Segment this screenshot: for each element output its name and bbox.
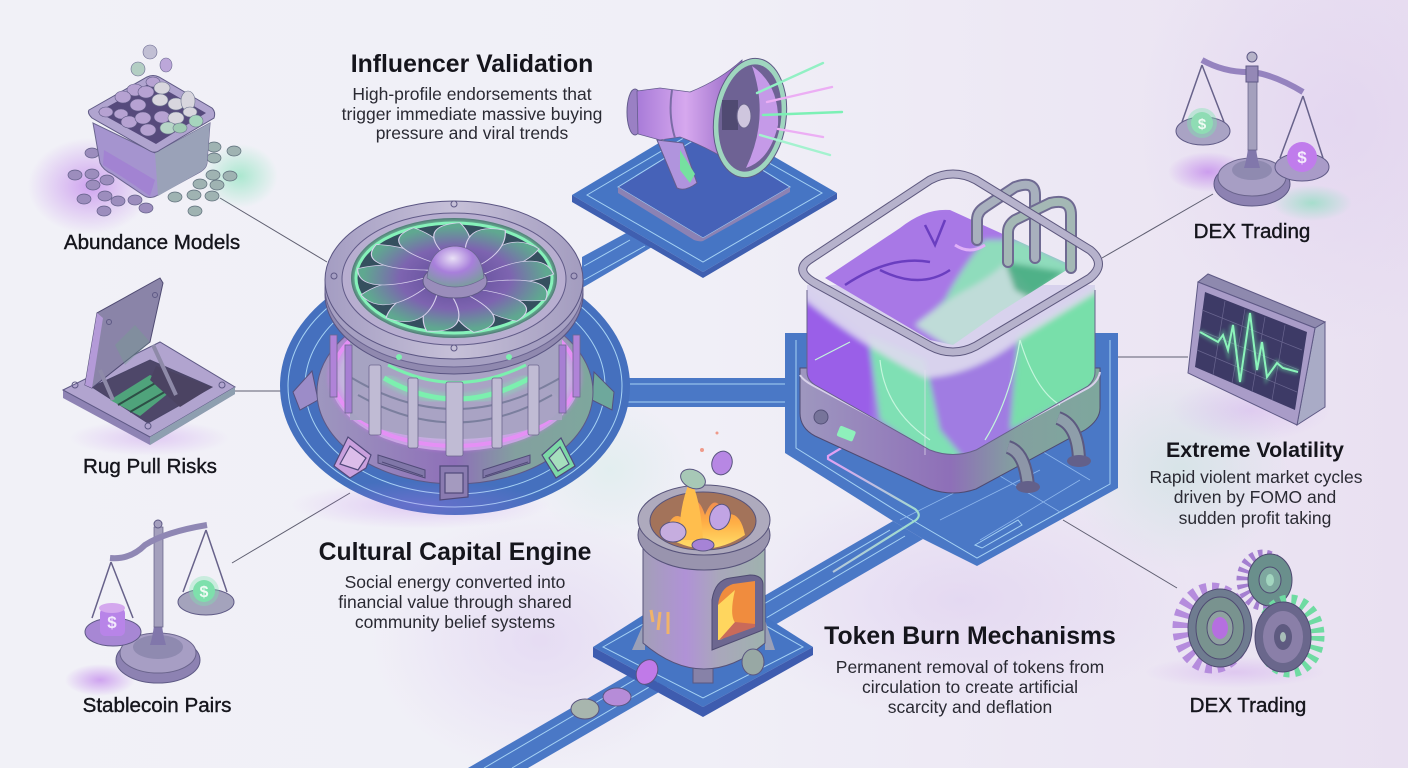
- heading: token burn mechanisms: scarcity and deflation: [888, 697, 1052, 717]
- heading: token burn mechanisms: [824, 623, 1116, 717]
- heading: cultural capital engine: financial value through shared: [338, 592, 572, 612]
- icon: balance scale (dex trading): $: [1297, 148, 1307, 167]
- heading: influencer validation: pressure and viral trends: [376, 123, 569, 143]
- heading: influencer validation: Influencer Validation: [351, 51, 593, 78]
- heading: influencer validation: trigger immediate massive buying: [342, 104, 602, 124]
- icon: balance scale (dex trading): [1168, 52, 1352, 221]
- heading: extreme volatility: sudden profit taking: [1179, 508, 1331, 528]
- panel: megaphone platform: [572, 116, 837, 278]
- label: abundance models: Abundance Models: [64, 231, 240, 254]
- icon: balance scale (stablecoin pairs): [65, 520, 234, 696]
- heading: influencer validation: [342, 51, 602, 143]
- heading: cultural capital engine: Social energy converted into: [345, 572, 565, 592]
- panel: furnace platform: [593, 577, 813, 717]
- heading: cultural capital engine: Cultural Capital Engine: [319, 539, 591, 566]
- panel: tank platform: [785, 333, 1118, 566]
- icon: balance scale (stablecoin pairs): $: [107, 613, 117, 632]
- illustration: cultural capital engine: [293, 201, 614, 500]
- blue paths between platforms: [468, 232, 923, 768]
- tank rim: [803, 174, 1098, 352]
- icon: volatility monitor: [1170, 274, 1330, 442]
- big gear: [1180, 589, 1252, 667]
- heading: influencer validation: High-profile endorsements that: [352, 84, 592, 104]
- label: dex trading bottom: DEX Trading: [1190, 694, 1306, 717]
- engine columns: [330, 335, 580, 456]
- tank pipes: [1008, 418, 1091, 493]
- label: dex trading top: DEX Trading: [1194, 220, 1310, 243]
- engine pedestals back: [293, 371, 614, 410]
- connector lines: [220, 194, 1213, 588]
- icon: balance scale (dex trading): $: [1198, 116, 1207, 133]
- engine pedestals front: [334, 437, 575, 500]
- heading: extreme volatility: driven by FOMO and: [1174, 487, 1336, 507]
- icon: trapdoor (rug pull risks): [63, 278, 235, 456]
- top gear: [1242, 554, 1292, 606]
- panel: engine platform: [280, 257, 630, 529]
- heading: cultural capital engine: community belief systems: [355, 612, 555, 632]
- label: stablecoin pairs: Stablecoin Pairs: [83, 694, 231, 717]
- heading: extreme volatility: [1150, 438, 1363, 528]
- icon: megaphone: [627, 54, 842, 189]
- glowing wire: [828, 447, 919, 572]
- heading: token burn mechanisms: Permanent removal of tokens from: [836, 657, 1104, 677]
- icon: coin box (abundance models): [28, 45, 278, 234]
- heading: extreme volatility: Rapid violent market cycles: [1150, 467, 1363, 487]
- label: rug pull risks: Rug Pull Risks: [83, 455, 217, 478]
- heading: cultural capital engine: [319, 539, 591, 632]
- engine top ring: [325, 201, 583, 374]
- engine core drum: [350, 330, 562, 439]
- tank base: [800, 368, 1100, 493]
- illustration: furnace: [571, 432, 775, 719]
- icon: balance scale (stablecoin pairs): $: [200, 584, 209, 601]
- heading: token burn mechanisms: circulation to create artificial: [862, 677, 1078, 697]
- tank water surface: [825, 210, 1066, 345]
- heading: token burn mechanisms: Token Burn Mechanisms: [824, 623, 1116, 650]
- engine base: [317, 300, 593, 484]
- engine vents: [378, 455, 530, 478]
- tank front water: [800, 280, 1100, 460]
- icon: gears: [1145, 554, 1325, 688]
- heading: extreme volatility: Extreme Volatility: [1166, 438, 1344, 462]
- right gear: [1255, 601, 1318, 672]
- illustration: liquid tank: [800, 174, 1100, 493]
- tank handles: [977, 185, 1071, 268]
